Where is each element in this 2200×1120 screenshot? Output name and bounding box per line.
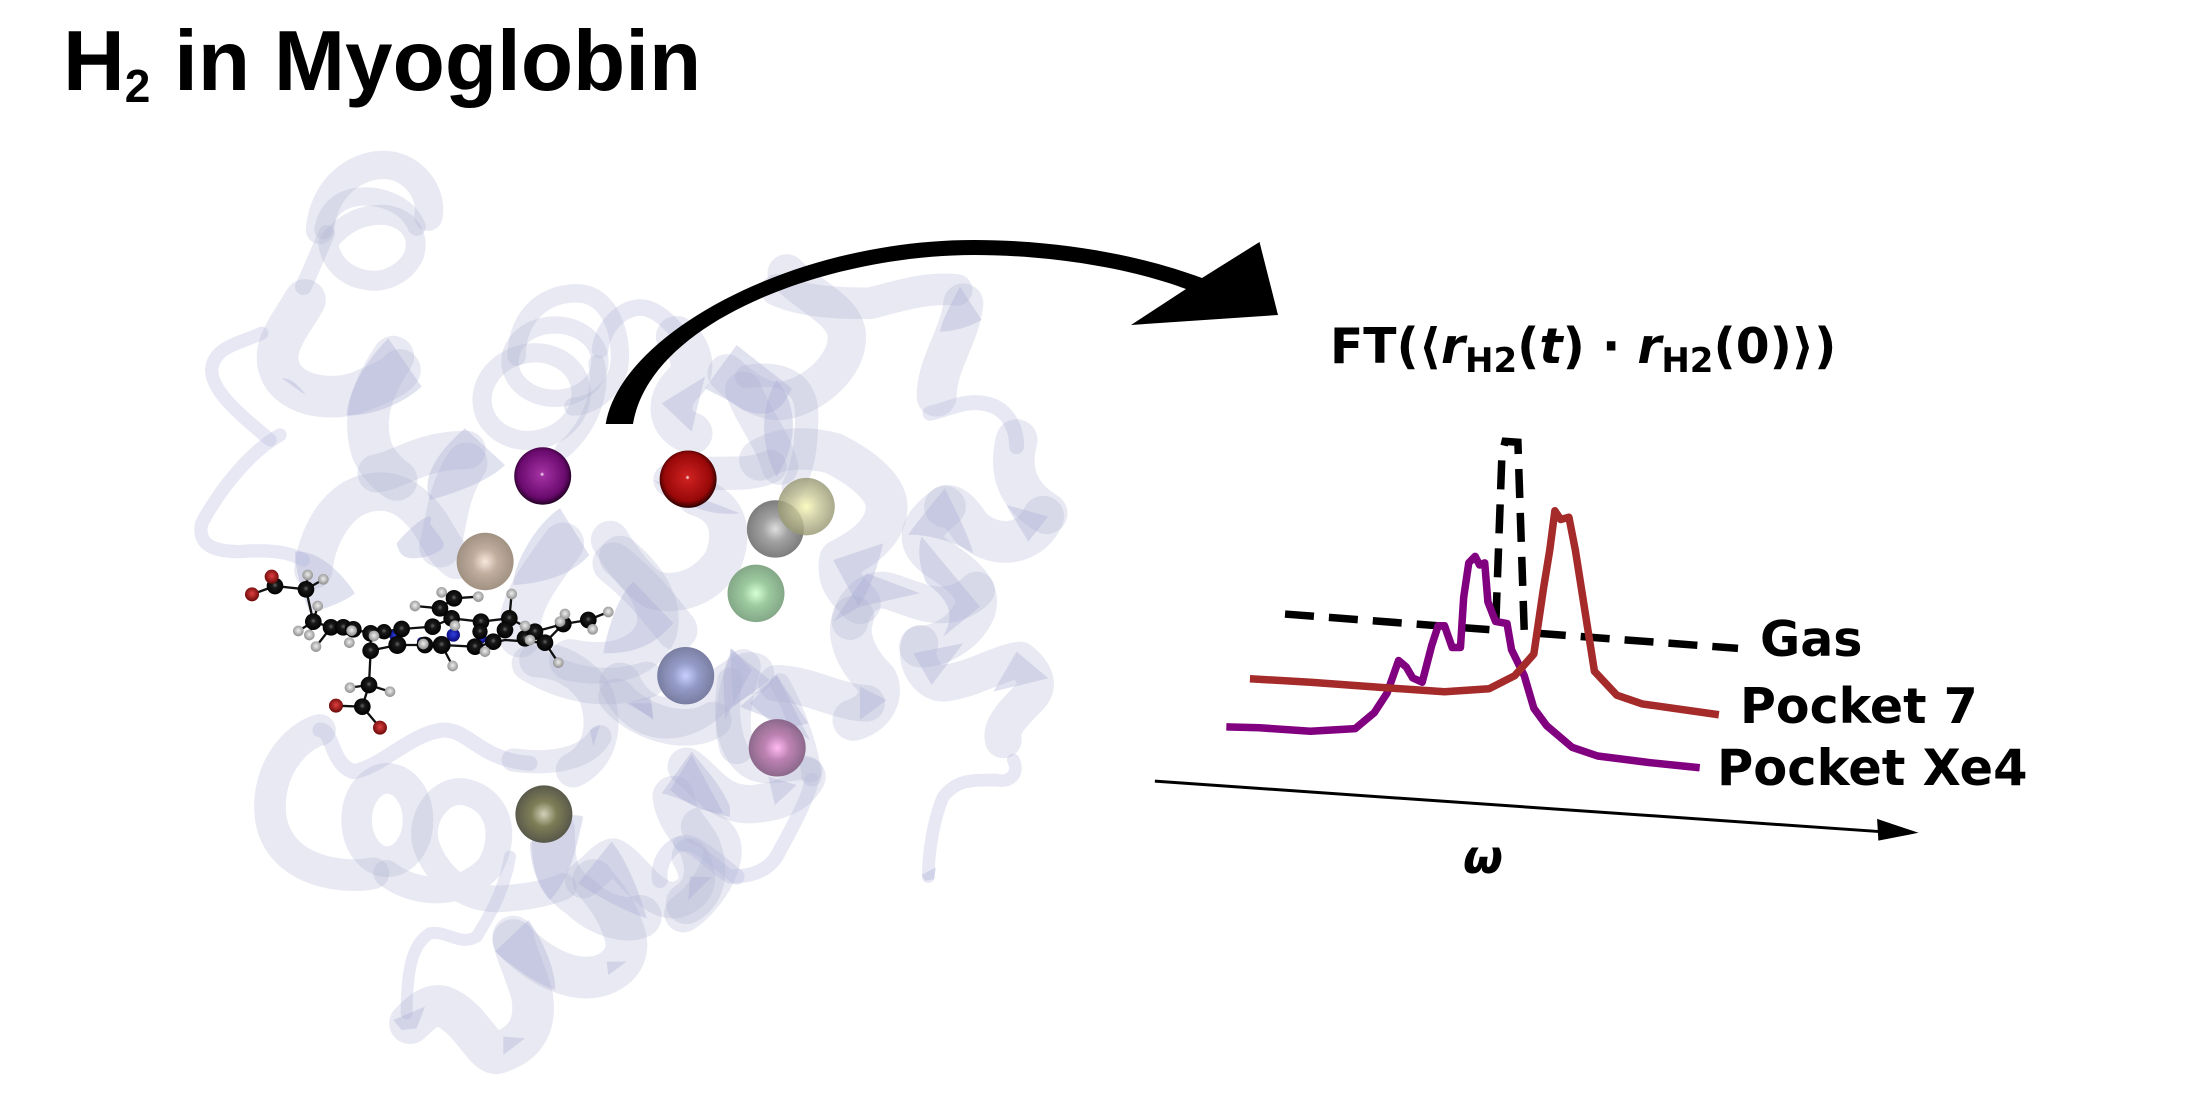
- ribbon: lower-right helices and C-terminal tube: [670, 648, 1015, 913]
- legend label: Pocket Xe4: Pocket Xe4: [1717, 739, 2028, 797]
- legend label: Gas: Gas: [1760, 611, 1862, 668]
- protein ribbon: [201, 165, 1048, 1055]
- legend label: Pocket 7: Pocket 7: [1740, 678, 1978, 735]
- formula label: t) · r: [1539, 319, 1661, 375]
- title: 2: [125, 60, 150, 112]
- heme molecule: [245, 570, 614, 735]
- spectrum chart: [1155, 441, 1919, 841]
- sphere: yellow pocket: [778, 478, 835, 535]
- curve: gas (dashed): [1285, 441, 1738, 648]
- curve: pocket 7: [1250, 511, 1719, 715]
- sphere: pocket Xe4 (purple): [514, 447, 571, 505]
- formula label: (0)⟩): [1713, 319, 1836, 375]
- bonds: [252, 575, 608, 728]
- sphere: green pocket: [728, 565, 784, 622]
- title: H: [63, 14, 125, 109]
- sphere: olive pocket: [515, 785, 572, 843]
- axis label: omega: ω: [1463, 830, 1503, 884]
- sphere: blue pocket: [657, 647, 714, 704]
- sphere: grey pocket: [747, 500, 804, 558]
- formula label: FT(⟨r: [1330, 319, 1465, 375]
- sphere: tan pocket: [457, 533, 514, 590]
- curved arrow: [606, 240, 1278, 424]
- pocket spheres: [457, 447, 835, 843]
- formula label: H2: [1465, 341, 1517, 381]
- oxygen atoms: [245, 570, 387, 735]
- ribbon: upper-right helices: [570, 273, 1048, 747]
- sphere: pink pocket: [749, 719, 806, 777]
- axis line: [1155, 781, 1885, 832]
- formula label: (: [1517, 319, 1539, 375]
- formula label: H2: [1661, 341, 1713, 381]
- carbon atoms: [267, 578, 597, 715]
- axis arrowhead: [1877, 819, 1919, 841]
- ribbon: upper-left helices: [201, 165, 680, 637]
- curve: pocket Xe4: [1226, 556, 1700, 768]
- nitrogen atoms: [389, 628, 487, 646]
- ribbon: lower-left coils and bottom helix: [270, 660, 737, 1055]
- title: in Myoglobin: [150, 14, 701, 109]
- sphere: pocket 7 (red): [660, 450, 717, 508]
- hydrogen atoms: [293, 570, 614, 697]
